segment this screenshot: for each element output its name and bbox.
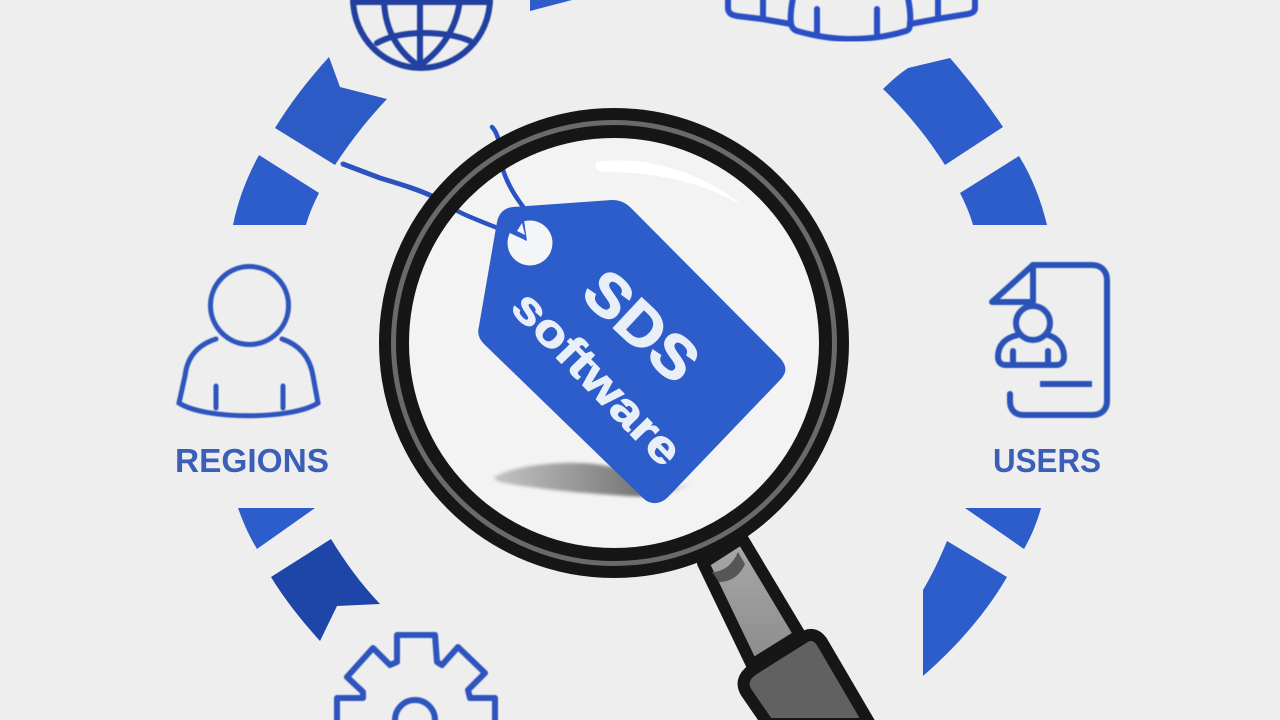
shaft shadow band bbox=[712, 552, 745, 582]
ring segment: top small bbox=[530, 0, 572, 11]
ring segment: lower right bbox=[923, 541, 1007, 676]
icon: regions person bbox=[179, 266, 318, 416]
ring segment: lower right small bbox=[965, 508, 1041, 549]
hole wedge highlight bbox=[517, 223, 525, 235]
icon: users document bbox=[992, 265, 1107, 415]
ring segment: upper left ribbon bbox=[275, 57, 387, 165]
icon: people top bbox=[728, 0, 975, 39]
label: users: USERS bbox=[993, 442, 1101, 479]
hole string wedge bbox=[497, 220, 527, 241]
price tag bbox=[478, 200, 785, 503]
lens highlight bbox=[595, 160, 743, 206]
label: regions: REGIONS bbox=[175, 442, 329, 479]
tag subtitle: software bbox=[502, 281, 693, 476]
tag shadow right bbox=[660, 484, 692, 497]
icon: globe bbox=[353, 0, 490, 68]
tag shadow bbox=[493, 463, 650, 497]
tag string bbox=[492, 127, 524, 208]
ring segment: lower left small bbox=[238, 508, 315, 549]
ring segment: left upper bbox=[233, 155, 319, 225]
tag hole bbox=[508, 220, 552, 266]
magnifier handle grip bbox=[744, 635, 870, 720]
magnifier rim bbox=[394, 122, 834, 564]
ring segment: upper right bbox=[883, 58, 1003, 165]
magnifier lens bbox=[406, 135, 822, 551]
left string inside lens bbox=[436, 198, 500, 229]
ring segment: lower left ribbon bbox=[271, 539, 380, 641]
string to ring bbox=[343, 164, 436, 198]
tag title: SDS bbox=[570, 257, 712, 396]
icon: gear bbox=[337, 635, 495, 720]
ring segment: right upper bbox=[960, 156, 1047, 225]
magnifier handle shaft bbox=[703, 538, 800, 665]
